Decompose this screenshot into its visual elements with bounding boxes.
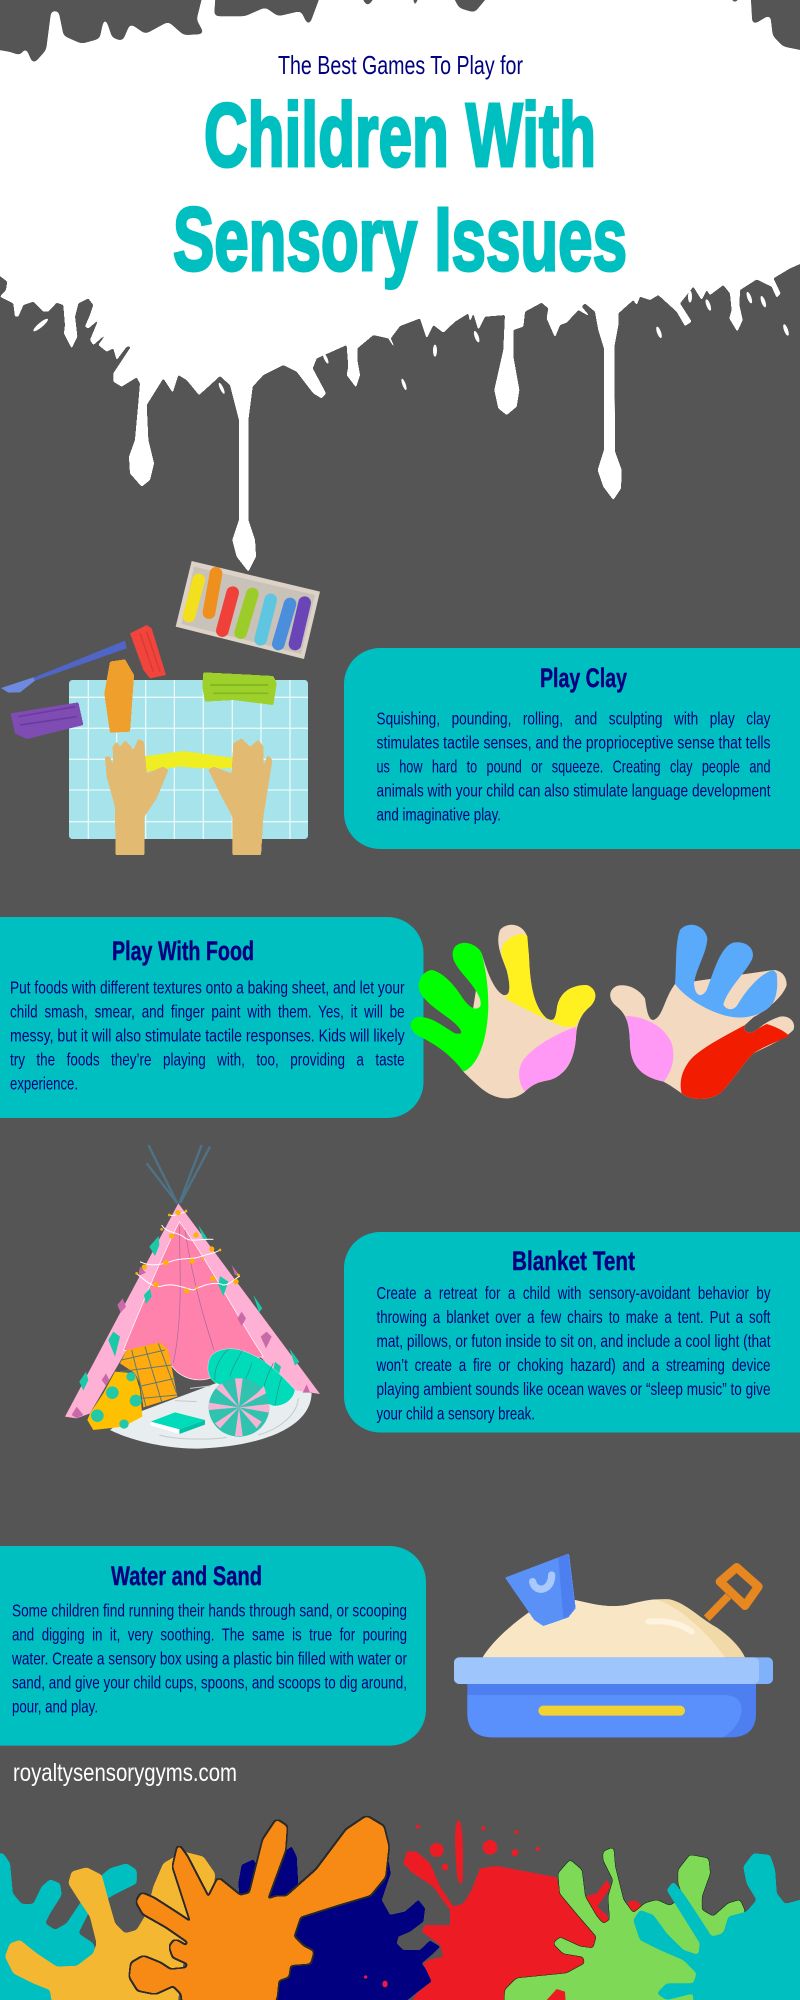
teal splat right (633, 1853, 800, 2000)
book (151, 1412, 205, 1434)
hands on clay (105, 738, 272, 855)
illustration: painted hands (411, 925, 794, 1099)
subtitle: The Best Games To Play for (278, 50, 523, 80)
green clay (202, 672, 277, 705)
yellow splat (5, 1852, 215, 2000)
sand mound (483, 1599, 745, 1657)
box front (467, 1695, 742, 1737)
teal splat left (0, 1853, 137, 2000)
illustration: sand box (454, 1553, 773, 1737)
illustration: play clay tray, mat and hands (1, 561, 320, 855)
body: play with food (10, 978, 405, 1094)
tent leaf pattern (79, 1225, 299, 1391)
dark paint edge along the top (0, 0, 800, 64)
left painted hand (411, 925, 595, 1098)
body: water and sand: water. Create a sensory box using a plastic bin filled with water or (11, 1649, 407, 1669)
box handle (538, 1706, 685, 1716)
body: blanket tent (376, 1283, 771, 1424)
body: play with food: Put foods with different textures onto a baking sheet, and let your (10, 978, 405, 998)
body: blanket tent: your child a sensory break. (376, 1404, 535, 1424)
heading: play with food: Play With Food (112, 936, 254, 966)
body: play clay: and imaginative play. (376, 804, 501, 824)
bucket (505, 1553, 576, 1626)
floor mat (110, 1367, 312, 1449)
title block (173, 50, 627, 290)
yellow clay roll (129, 751, 247, 772)
green splat (503, 1847, 745, 2000)
white paint splash header background (0, 0, 800, 572)
green bolster (208, 1349, 295, 1406)
paint splats footer (0, 1817, 800, 2000)
tent purple leaves (72, 1265, 310, 1418)
navy splat (238, 1847, 440, 2000)
light bulbs (135, 1210, 240, 1294)
round striped pillow (209, 1378, 269, 1437)
panel: water and sand (0, 1546, 426, 1746)
illustration: blanket tent (65, 1145, 320, 1449)
string lights (136, 1212, 240, 1290)
cutting mat (69, 680, 308, 839)
orange splat (130, 1817, 388, 2000)
tent fold lines (173, 1227, 214, 1363)
yellow pillow (87, 1372, 142, 1430)
heading: water and sand: Water and Sand (111, 1561, 262, 1591)
panel: play with food (0, 917, 424, 1118)
body: water and sand: and digging in it, very soothing. The same is true for pouring (12, 1624, 407, 1644)
right painted hand (610, 925, 794, 1099)
body: water and sand (11, 1600, 407, 1716)
box rim (454, 1657, 773, 1684)
clay tray (176, 561, 320, 659)
title line 1: Children With (204, 86, 596, 186)
panel: play clay (344, 648, 800, 849)
heading: play clay: Play Clay (540, 663, 627, 693)
red splat and droplets (393, 1820, 642, 2000)
body: water and sand: pour, and play. (12, 1696, 98, 1716)
purple clay (11, 702, 83, 739)
red clay (130, 625, 166, 678)
tent opening (123, 1222, 263, 1380)
body: play clay (376, 708, 771, 824)
body: water and sand: Some children find running their hands through sand, or scooping (12, 1600, 407, 1620)
shovel (707, 1567, 758, 1618)
body: play with food: child smash, smear, and finger paint with them. Yes, it will be (10, 1002, 405, 1022)
panel: blanket tent (344, 1232, 800, 1432)
body: water and sand: sand, and give your child cups, spoons, and scoops to dig around, (12, 1673, 407, 1693)
heading: blanket tent: Blanket Tent (512, 1246, 635, 1276)
box body (467, 1684, 756, 1737)
red drop on green (547, 1989, 566, 2000)
tent cloth (65, 1203, 320, 1418)
footer website: royaltysensorygyms.com (13, 1759, 237, 1787)
clay knife (1, 641, 127, 693)
body: play with food: messy, but it will also stimulate tactile responses. Kids will likely (10, 1025, 405, 1045)
tent poles (147, 1145, 210, 1203)
orange checked cushion (120, 1342, 177, 1407)
orange clay (104, 659, 134, 733)
red droplets on navy (364, 1975, 388, 1987)
body: play with food: experience. (10, 1074, 78, 1094)
body: play with food: try the foods they’re playing with, too, providing a taste (10, 1049, 405, 1069)
